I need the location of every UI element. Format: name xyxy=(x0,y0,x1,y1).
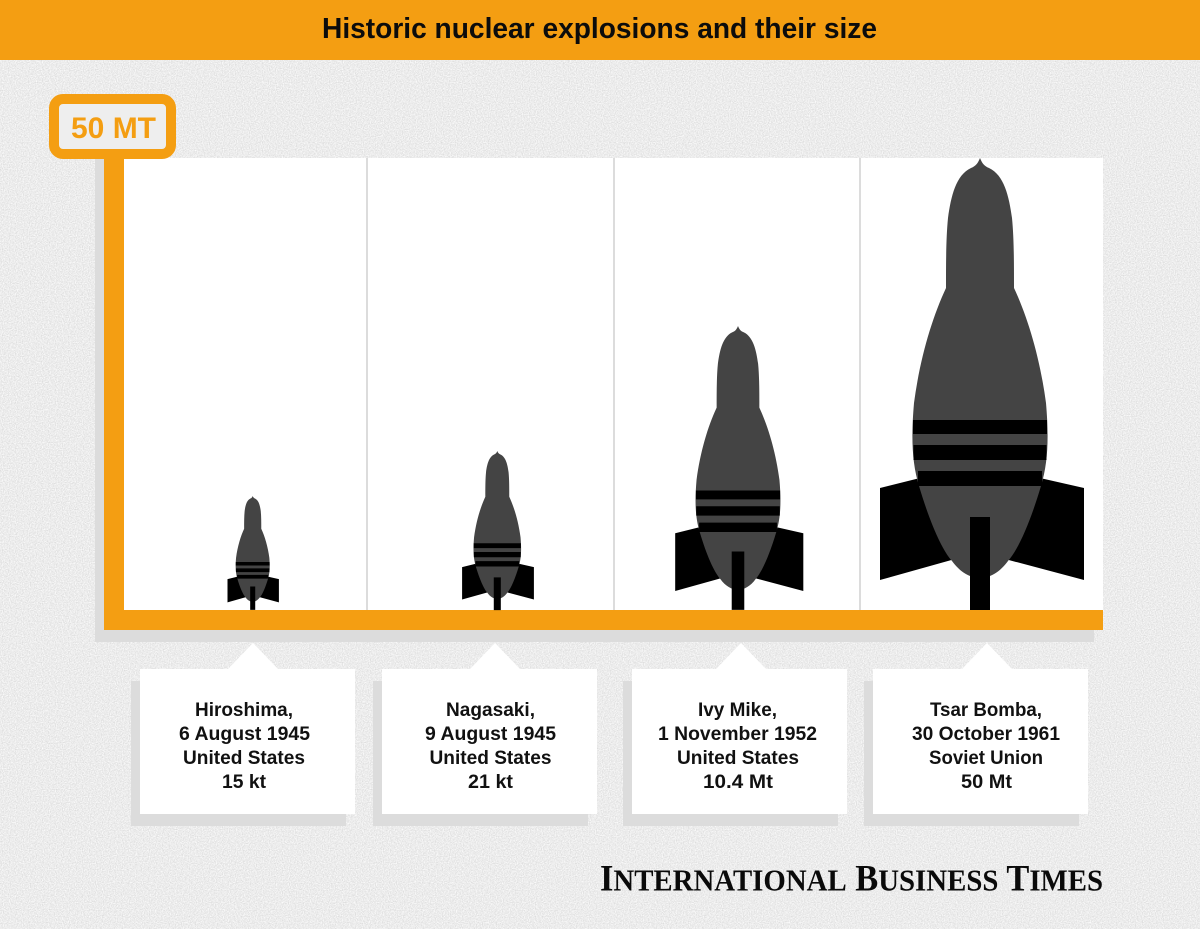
callout: Ivy Mike xyxy=(623,643,847,826)
callout: Nagasaki: United States xyxy=(430,748,552,769)
chart axes xyxy=(104,150,1103,630)
callout: Hiroshima: Hiroshima, xyxy=(195,700,293,721)
callout: Tsar Bomba: Tsar Bomba, xyxy=(930,700,1042,721)
callout: Hiroshima: 6 August 1945 xyxy=(179,724,310,745)
callout: Tsar Bomba xyxy=(864,643,1088,826)
callout: Nagasaki xyxy=(373,643,597,826)
callout: Ivy Mike: 10.4 Mt xyxy=(703,772,774,793)
callout: Hiroshima: 15 kt xyxy=(222,772,267,793)
callout: Nagasaki: 21 kt xyxy=(468,772,514,793)
callout: Nagasaki: Nagasaki, xyxy=(446,700,535,721)
callout: Ivy Mike: Ivy Mike, xyxy=(698,700,777,721)
rocket: Ivy Mike xyxy=(675,326,803,610)
callout: Ivy Mike: United States xyxy=(677,748,799,769)
title: Historic nuclear explosions and their size xyxy=(322,13,877,45)
title banner xyxy=(0,0,1200,60)
rocket: Hiroshima xyxy=(228,496,279,610)
scale badge: 50 MT: 50 MT xyxy=(71,112,156,145)
callout: Tsar Bomba: 30 October 1961 xyxy=(912,724,1060,745)
callout: Hiroshima xyxy=(131,643,355,826)
callout: Tsar Bomba: Soviet Union xyxy=(929,748,1043,769)
callout: Ivy Mike: 1 November 1952 xyxy=(658,724,817,745)
callout: Nagasaki: 9 August 1945 xyxy=(425,724,556,745)
publisher logo: INTERNATIONAL BUSINESS TIMES xyxy=(600,858,1103,900)
scale badge: 50 MT xyxy=(54,99,171,154)
callout: Hiroshima: United States xyxy=(183,748,305,769)
chart panel xyxy=(95,150,1103,642)
callout: Tsar Bomba: 50 Mt xyxy=(961,772,1013,793)
rocket: Nagasaki xyxy=(462,451,534,610)
rocket: Tsar Bomba xyxy=(880,158,1084,610)
